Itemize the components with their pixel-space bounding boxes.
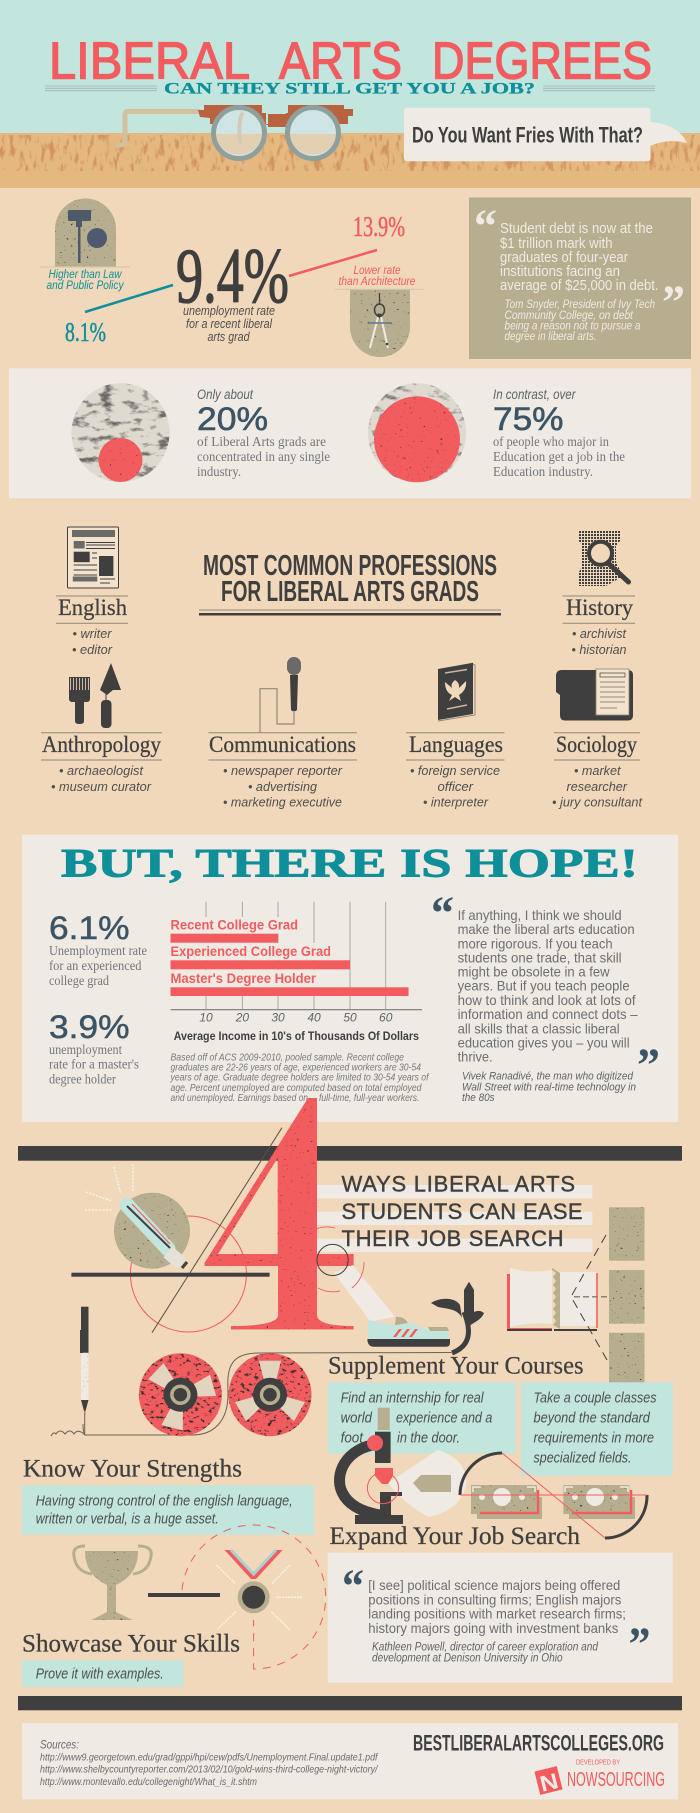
callout: examples [22,1660,184,1687]
icon: glasses [118,105,353,158]
sources list: http://www.montevallo.edu/collegenight/What_is_it.shtm [40,1776,257,1788]
text: unemployment rate [183,303,275,344]
label: Languages: Languages [409,732,503,757]
panel: student debt quote [469,198,691,359]
callout: internship: world [341,1410,373,1427]
icon: right reel [228,1353,312,1436]
callout: internship: foot [341,1430,364,1447]
callout: classes: specialized fields. [534,1450,632,1467]
text: only about 20% [197,387,330,480]
icon: money bills with tape arcs [460,1453,647,1538]
panel: kathleen powell quote [328,1553,673,1683]
attribution: Kathleen Powell, director of career exploration and [372,1642,599,1654]
icon: passport [438,663,475,721]
text: in contrast 75%: Education get a job in the [493,450,625,465]
text: only about 20%: of Liberal Arts grads are [197,435,326,450]
label: Sociology: researcher [566,779,628,794]
quote text: students one trade, that skill [458,949,622,965]
quote text: all skills that a classic liberal [458,1020,620,1036]
callout: internship [328,1382,516,1454]
quote text: might be obsolete in a few [458,964,610,980]
quote text: landing positions with market research firms; [368,1606,626,1622]
stat: 6.1%: for an experienced [49,959,142,974]
heading [199,550,501,614]
heading: FOR LIBERAL ARTS GRADS [221,576,479,608]
attribution: development at Denison University in Ohio [372,1652,563,1664]
stat: 3.9%: degree holder [49,1073,116,1088]
callout: strengths [22,1485,314,1535]
quote text: how to think and look at lots of [458,992,636,1008]
attribution [504,299,655,343]
text: in contrast 75%: In contrast, over [493,387,576,402]
attribution: Tom Snyder, President of Ivy Tech [504,299,655,311]
heading: supplement your courses: Supplement Your Courses [328,1352,584,1379]
bar chart: average income: 40 [307,1011,321,1025]
label: English: • writer [72,626,112,641]
callout: internship: in the door. [397,1430,460,1447]
bar chart: average income: Recent College Grad [170,916,298,932]
heading: ways liberal arts students [342,1172,582,1251]
text: only about 20%: industry. [197,465,241,480]
icon: pen [80,1307,88,1435]
callout: classes: Take a couple classes [534,1390,657,1407]
sources list [40,1737,378,1788]
heading: ways liberal arts students: WAYS LIBERAL ARTS [342,1172,575,1197]
label: Communications: • newspaper reporter [223,763,343,778]
icon: lightbulb [85,1164,190,1269]
callout: classes: requirements in more [534,1430,654,1447]
callout: classes [521,1382,673,1476]
text: in contrast 75%: Education industry. [493,465,593,480]
label: Communications: Communications [209,732,356,757]
sources list: http://www.shelbycountyreporter.com/2013/02/10/gold-wins-third-college-night-victory/ [40,1764,378,1776]
label: History: • historian [572,642,626,657]
label: History: • archivist [572,626,627,641]
panel: most common professions [41,527,643,810]
subtitle with rules: CAN THEY STILL GET YOU A JOB? [164,80,535,97]
text: unemployment rate: for a recent liberal [186,316,273,331]
bar chart: average income: Master's Degree Holder [170,970,317,986]
label: Sociology: Sociology [556,732,637,757]
bar chart: average income: 20 [235,1011,249,1025]
icon: open quote: “ [431,887,454,940]
bar chart: average income: Average Income in 10's of Thousands Of Dollars [174,1031,419,1043]
stat: 3.9%: unemployment [49,1043,122,1058]
icon: microscope [340,1408,466,1524]
text: in contrast 75% [493,387,625,480]
developed by: DEVELOPED BY [576,1759,620,1766]
callout: classes: beyond the standard [534,1410,650,1427]
panel: but there is hope [22,835,678,1122]
connector line teal [85,285,173,312]
bar chart: average income: 30 [271,1011,285,1025]
quote text: make the liberal arts education [458,921,635,937]
text: only about 20%: concentrated in any single [197,450,330,465]
icon: magnifying glass on parchment [578,531,628,586]
callout: internship: Find an internship for real [341,1390,484,1407]
logo: nowsourcing: N [537,1768,561,1797]
icon: microphone [260,657,301,733]
label: Communications [208,732,357,810]
label: Sociology [552,732,643,810]
label: Communications: • advertising [248,779,318,794]
icon: brush and trowel [69,663,121,728]
title: ARTS [279,32,402,90]
bar chart: average income [170,902,422,1043]
label: higher than law: and Public Policy [46,278,124,292]
bar chart: average income: 50 [343,1011,357,1025]
label: Anthropology: Anthropology [42,732,161,757]
label: higher than law [46,267,124,292]
sources list: Sources: [40,1737,79,1751]
attribution: the 80s [462,1092,495,1104]
icon: gavel arch [40,199,130,267]
label: History [562,595,635,657]
label: Communications: • marketing executive [223,795,342,810]
quote text: positions in consulting firms; English majors [368,1591,621,1607]
heading: BUT, THERE IS HOPE! [61,841,638,886]
stat: 3.9%: 3.9% [49,1009,130,1045]
label: Languages [406,732,504,810]
heading: know your strengths: Know Your Strengths [23,1456,242,1483]
attribution [462,1070,636,1104]
stat: 3.9%: rate for a master's [49,1058,139,1073]
attribution: being a reason not to pursue a [504,320,640,332]
quote text [500,221,658,294]
icon: open quote: “ [474,200,497,253]
title: DEGREES [432,32,652,90]
text: only about 20%: 20% [197,401,268,437]
label: Languages: officer [438,779,474,794]
attribution: Vivek Ranadivé, the man who digitized [462,1070,634,1082]
quote text: graduates of four-year [500,250,628,266]
stat: 6.1% [49,910,147,989]
footnote: years of age. Graduate degree holders are limited to 30-54 years of [170,1073,430,1084]
icon: leg and sneaker [316,1227,450,1347]
icon: close quote: ” [637,1039,660,1092]
quote text: thrive. [458,1049,493,1065]
sources list: http://www9.georgetown.edu/grad/gppi/hpi/cew/pdfs/Unemployment.Final.update1.pdf [40,1752,378,1764]
label: Anthropology: • museum curator [51,779,152,794]
heading: ways liberal arts students: STUDENTS CAN EASE [342,1199,582,1224]
stat: 8.1%: 8.1% [65,317,106,347]
footnote: graduates are 22-26 years of age, experienced workers are 30-54 [170,1063,421,1074]
attribution: Wall Street with real-time technology in [462,1081,636,1093]
label: Sociology: • market [574,763,622,778]
thin diagonal line [152,1128,282,1333]
callout: strengths: written or verbal, is a huge asset. [36,1510,219,1527]
stat: 13.9%: 13.9% [353,212,405,243]
icon: book with dashed arrows [507,1235,607,1360]
quote text: average of $25,000 in debt. [500,278,658,294]
heading: MOST COMMON PROFESSIONS [203,550,497,582]
text: unemployment rate: arts grad [208,329,250,344]
text: in contrast 75%: 75% [493,401,564,437]
icon: trophy [74,1546,151,1620]
footnote: age. Percent unemployed are computed based on total employed [170,1083,422,1094]
callout: speech bubble [404,108,687,161]
text: only about 20%: Only about [197,387,254,402]
label: Sociology: • jury consultant [552,795,643,810]
bar chart: average income: 10 [199,1011,213,1025]
attribution [372,1642,599,1664]
icon: medal [216,1550,303,1630]
label: lower rate: than Architecture [338,274,416,288]
title: LIBERAL [49,32,250,90]
heading: ways liberal arts students: THEIR JOB SEARCH [342,1226,564,1251]
quote text: information and connect dots – [458,1006,638,1022]
quote text: more rigorous. If you teach [458,935,613,951]
label: lower rate: Lower rate [354,263,401,277]
subtitle with rules [45,80,655,97]
heading: expand your job search: Expand Your Job Search [330,1523,580,1550]
heading stripes [317,1185,592,1252]
title [49,32,652,90]
icon: fleur ornament [431,1282,484,1353]
label: English: • editor [72,642,113,657]
icon: close quote: ” [628,1618,650,1671]
label: Languages: • foreign service [410,763,500,778]
footnote: Based off of ACS 2009-2010, pooled sample. Recent college [170,1053,404,1064]
big number 4 [204,1098,354,1330]
stat: 6.1%: Unemployment rate [49,944,147,959]
footnote: and unemployed. Earnings based on [170,1093,308,1104]
quote text [368,1577,626,1636]
callout: examples: Prove it with examples. [36,1665,164,1682]
bottom dark bar [18,1696,682,1710]
icon: open quote: “ [342,1560,364,1613]
quote text [458,907,638,1065]
top dark bar [18,1146,682,1161]
stat: 3.9% [49,1009,139,1088]
tan strips [609,1207,644,1386]
callout: internship: experience and a [396,1410,492,1427]
quote text: If anything, I think we should [458,907,622,923]
panel: concentration stats [9,368,691,498]
text: in contrast 75%: of people who major in [493,435,609,450]
panel: header scene [0,0,700,188]
dashed red circle [182,1525,326,1669]
quote text: $1 trillion mark with [500,236,612,252]
callout: strengths: Having strong control of the english language, [36,1493,293,1510]
quote text: years. But if you teach people [458,978,630,994]
quote text: history majors going with investment banks [368,1620,618,1636]
stat: 6.1%: college grad [49,974,109,989]
label: English: English [58,595,127,620]
icon: left reel [132,1346,224,1438]
attribution: degree in liberal arts. [504,331,596,343]
divider bar [148,1593,220,1597]
label: English [56,595,128,657]
quote text: Student debt is now at the [500,221,653,237]
logo: nowsourcing [534,1766,665,1797]
stat: 6.1%: 6.1% [49,910,130,946]
text: unemployment rate: unemployment rate [183,303,275,318]
icon: open book [556,669,633,720]
chart: 75% circle [368,383,466,482]
icon: newspaper [68,527,118,588]
shelf [71,1273,270,1277]
panel: unemployment rates [40,199,424,357]
connector line red [289,250,377,276]
icon: close quote: ” [662,276,685,329]
label: Anthropology: • archaeologist [59,763,144,778]
panel: sources and footer [22,1723,678,1799]
quote text: [I see] political science majors being offered [368,1577,620,1593]
chart: 20% circle [72,383,170,482]
footnote [170,1053,430,1104]
panel: four ways [18,1098,682,1687]
label: Languages: • interpreter [423,795,489,810]
label: Anthropology [41,732,162,794]
bar chart: average income: Experienced College Grad [170,943,331,959]
footnote: full-time, full-year workers. [319,1093,420,1104]
label: higher than law: Higher than Law [48,267,123,281]
icon: compass arch [335,289,424,357]
label: History: History [566,595,633,620]
stat: 9.4%: 9.4% [176,232,289,319]
attribution: Community College, on debt [504,310,634,322]
tape line and wave [51,1352,453,1436]
label: lower rate [338,263,416,288]
quote text: institutions facing an [500,264,620,280]
heading: showcase your skills: Showcase Your Skills [22,1631,240,1658]
bar chart: average income: 60 [379,1011,393,1025]
quote text: education gives you – you will [458,1034,630,1050]
thin red circle [130,1216,246,1332]
